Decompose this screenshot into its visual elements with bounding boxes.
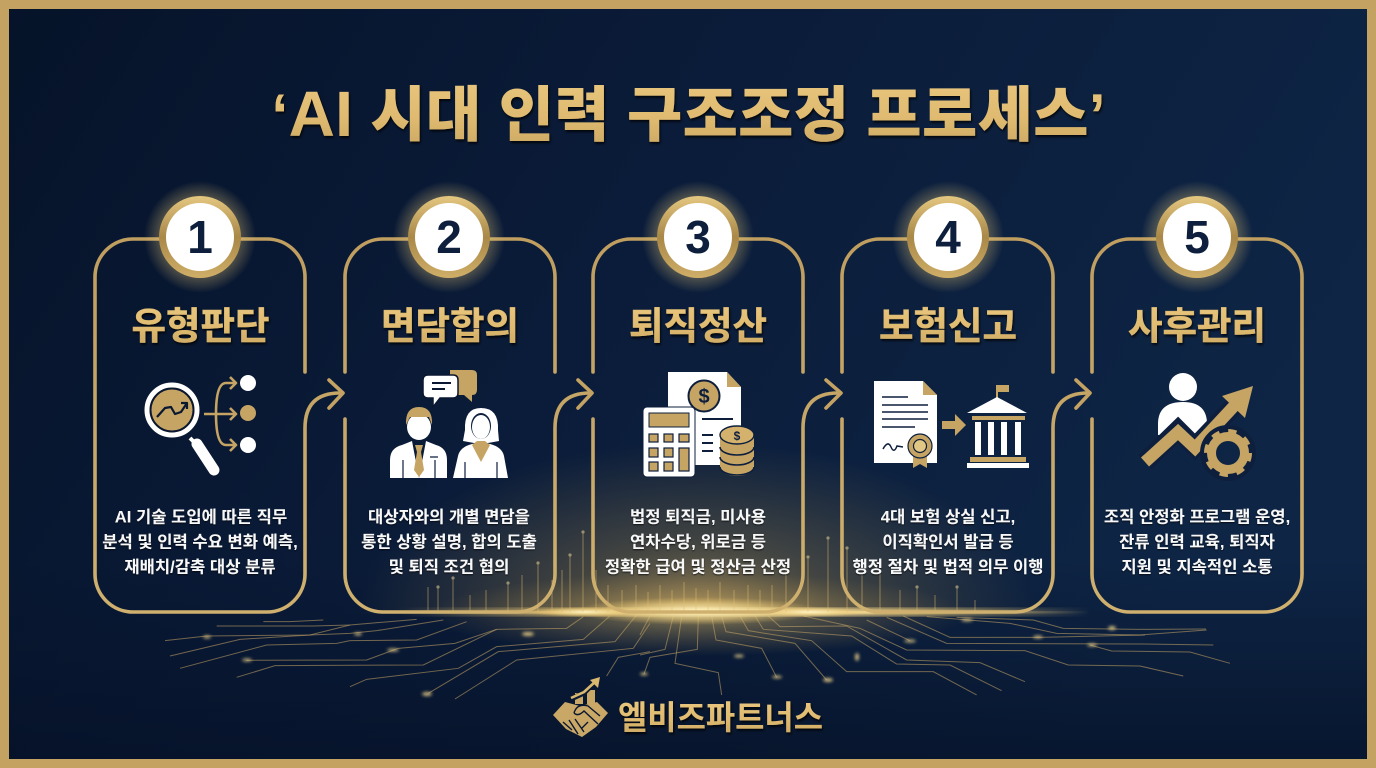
description 2: 및 퇴직 조건 협의 [389,558,509,576]
description 5 [1104,508,1290,576]
number badge 5 [1141,181,1253,293]
description 4: 이직확인서 발급 등 [882,532,1014,552]
heading 2: 면담합의 [381,305,519,347]
icon: calculator, document and coins [643,372,754,477]
number badge 3 [642,181,754,293]
logo: 엘비즈파트너스 [553,677,823,737]
heading 4: 보험신고 [879,305,1017,347]
number badge 2 [393,181,505,293]
arrow 3 to 4 [826,380,841,408]
panel: step 5 사후관리 [1092,181,1302,612]
number badge 5: 5 [1184,211,1210,263]
description 2: 대상자와의 개별 면담을 [368,508,530,526]
description 3 [605,508,791,576]
description 1: 재배치/감축 대상 분류 [124,558,276,576]
panel: step 3 퇴직정산 [593,181,841,612]
description 3: 정확한 급여 및 정산금 산정 [605,558,791,576]
description 2 [361,508,537,576]
panel: step 2 면담합의 [345,181,592,612]
description 1 [102,508,298,576]
number badge 2: 2 [436,211,462,263]
icon: person, growth arrow and gear [1145,373,1253,474]
icon: calculator, document and coins: $ [698,386,710,408]
arrow 1 to 2 [329,380,343,408]
bright horizon line [400,597,1090,625]
description 5: 지원 및 지속적인 소통 [1121,558,1273,576]
description 5: 조직 안정화 프로그램 운영, [1104,508,1290,526]
card outline 4 [842,239,1088,612]
description 4: 4대 보험 상실 신고, [881,508,1015,526]
number badge 1: 1 [187,211,213,263]
description 5: 잔류 인력 교육, 퇴직자 [1119,532,1275,552]
heading 1: 유형판단 [132,305,270,347]
card outline 3 [593,239,838,612]
number badge 1 [144,181,256,293]
description 1: 분석 및 인력 수요 변화 예측, [102,532,298,552]
description 4 [853,508,1043,576]
heading 5: 사후관리 [1128,305,1266,347]
card outline 1 [95,239,340,612]
description 1: AI 기술 도입에 따른 직무 [115,508,287,526]
icon: handshake with rising arrow [553,677,608,737]
icon: calculator, document and coins: $ [734,429,741,443]
icon: two people talking [390,370,508,478]
number badge 4: 4 [935,211,961,263]
heading 3: 퇴직정산 [629,305,767,347]
description 3: 법정 퇴직금, 미사용 [630,508,766,526]
description 2: 통한 상황 설명, 합의 도출 [361,532,537,552]
panel: step 4 보험신고 [842,181,1090,612]
rising data lines [428,530,975,612]
arrow 2 to 3 [578,380,592,408]
icon: document to government building [874,381,1029,468]
title: ‘AI 시대 인력 구조조정 프로세스’ [272,78,1106,150]
card outline 5 [1092,239,1302,612]
icon: magnifier with branching arrows [147,375,256,470]
number badge 4 [892,181,1004,293]
panel: step 1 유형판단 [95,181,343,612]
circuit nodes [203,618,1116,696]
description 4: 행정 절차 및 법적 의무 이행 [853,556,1043,576]
logo wordmark: 엘비즈파트너스 [618,699,823,736]
description 3: 연차수당, 위로금 등 [630,532,766,552]
number badge 3: 3 [685,211,711,263]
circuit traces and light glow [165,530,1230,699]
arrow 4 to 5 [1076,380,1090,408]
card outline 2 [345,239,590,612]
